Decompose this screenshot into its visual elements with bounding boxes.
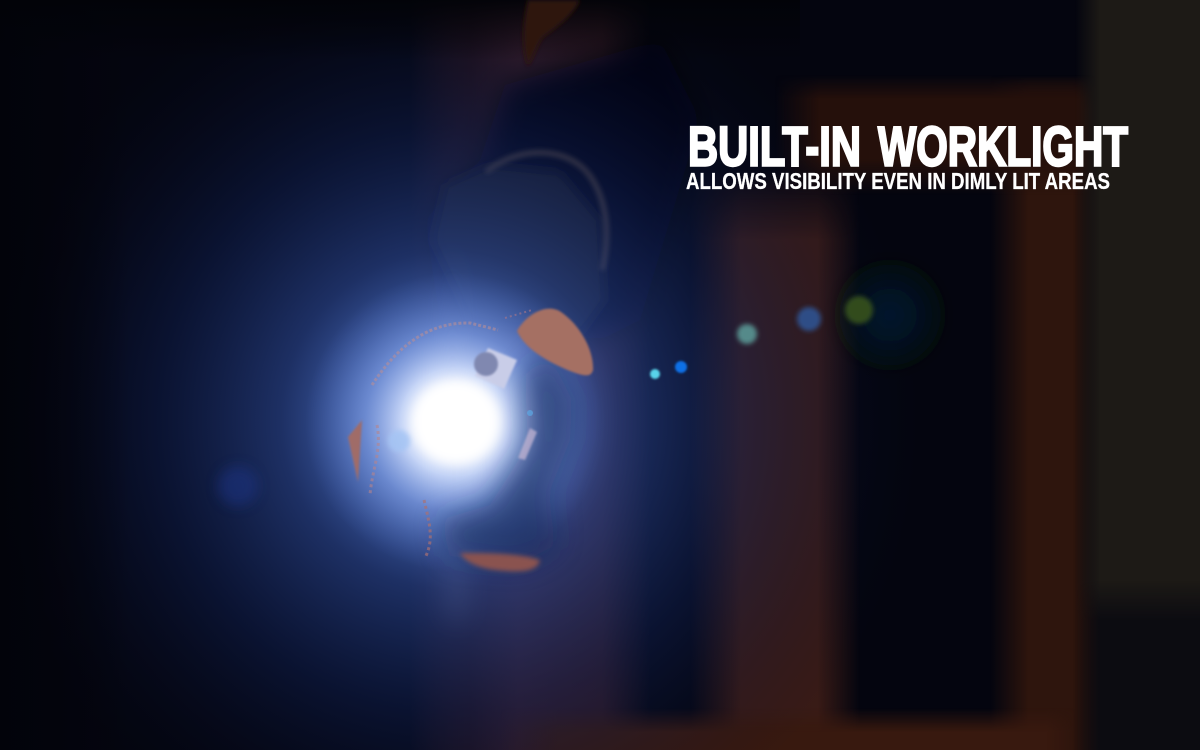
lens flares (218, 255, 950, 506)
background: door frame and wall (410, 0, 1200, 750)
skin at top of figure (524, 0, 580, 66)
right reflection (518, 428, 537, 460)
heading: BUILT-IN (688, 114, 861, 178)
stitching lower (424, 500, 430, 558)
worklight: tape measure body (348, 309, 593, 571)
left rim (348, 420, 362, 482)
figure: person's arm silhouette (425, 40, 700, 340)
light burst: core (305, 230, 605, 620)
sleeve highlight arc (486, 153, 607, 270)
light burst: bright centre (388, 380, 500, 464)
edge shading (0, 0, 800, 750)
stitching upper (372, 323, 498, 385)
belt clip pad (517, 309, 593, 375)
square window (475, 348, 517, 389)
stitching left (370, 425, 378, 495)
subheading: ALLOWS VISIBILITY EVEN IN DIMLY LIT AREAS (686, 168, 1110, 194)
lower rim (460, 553, 540, 571)
heading (688, 114, 1128, 178)
